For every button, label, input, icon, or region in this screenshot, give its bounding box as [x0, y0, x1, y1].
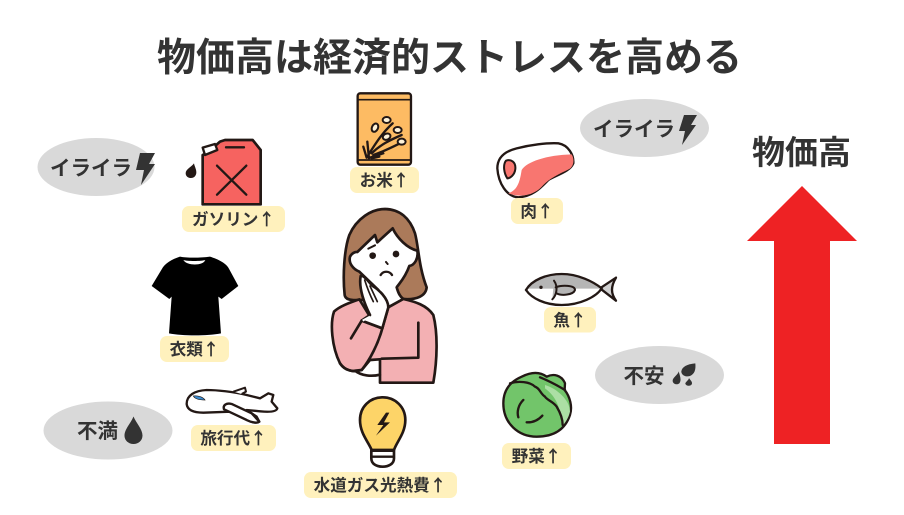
title: 物価高は経済的ストレスを高める: [157, 27, 742, 83]
callout: anxiety: 不安: [624, 359, 664, 389]
callout: irritation right: [580, 99, 709, 157]
callout: irritation right: イライラ: [593, 112, 675, 142]
icon: airplane: [187, 388, 277, 423]
icon: meat: [497, 143, 573, 197]
label: meat: 肉↑: [520, 198, 554, 222]
icon: cabbage: [503, 373, 571, 437]
label: meat: [511, 198, 563, 224]
label: clothes: [160, 336, 229, 362]
label: rice: お米↑: [360, 167, 409, 191]
woman illustration: [332, 209, 437, 383]
label: utilities: 水道ガス光熱費↑: [314, 472, 446, 496]
label: fish: 魚↑: [553, 307, 587, 331]
label: fish: [544, 307, 596, 332]
callout: irritation left: イライラ: [50, 151, 132, 181]
icon: light bulb: [360, 397, 405, 467]
heading: rising prices: 物価高: [752, 126, 851, 174]
icon: fish: [526, 274, 616, 305]
icon: gasoline can: [186, 140, 261, 204]
label: gasoline: ガソリン↑: [192, 206, 275, 230]
label: travel: 旅行代↑: [200, 425, 267, 449]
arrow: up: [747, 186, 857, 444]
label: rice: [350, 167, 419, 193]
callout: dissatisfaction: [44, 402, 172, 460]
label: clothes: 衣類↑: [170, 336, 219, 360]
icon: rice bag: [358, 93, 411, 165]
callout: dissatisfaction: 不満: [77, 414, 118, 444]
label: vegetables: 野菜↑: [512, 443, 561, 467]
callout: anxiety: [595, 346, 724, 404]
label: vegetables: [502, 443, 571, 469]
callout: irritation left: [38, 138, 155, 196]
icon: t-shirt: [152, 257, 238, 335]
